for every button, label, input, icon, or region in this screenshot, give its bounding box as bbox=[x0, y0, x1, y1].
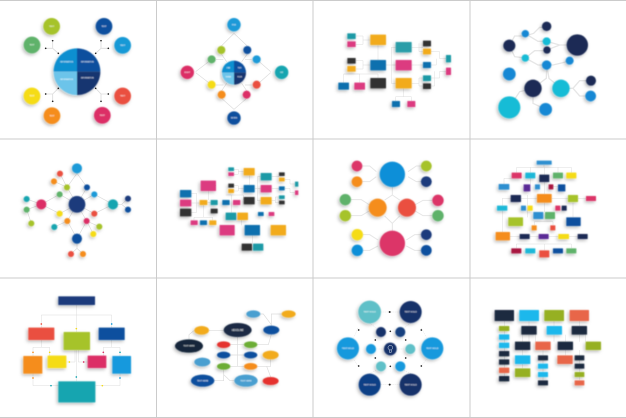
outer and inner nodes bbox=[181, 18, 288, 125]
connector dots bbox=[358, 311, 422, 386]
ovals bbox=[175, 310, 296, 387]
centre pie: THREE bbox=[226, 77, 232, 79]
circles: TEXT HOLD bbox=[364, 312, 376, 314]
circles bbox=[337, 301, 443, 396]
satellite circles: TEXT bbox=[100, 115, 106, 117]
panel: dense multicolour flow chart bbox=[496, 161, 596, 257]
outer and inner nodes: SEVEN bbox=[231, 118, 238, 120]
panel: diamond flow with pie centre bbox=[181, 18, 288, 125]
satellite circles: TEXT bbox=[120, 96, 126, 98]
pie chart hub: INFORMATION bbox=[81, 60, 94, 63]
centre pie: ONE bbox=[227, 67, 231, 69]
panel: wide box flow chart bbox=[180, 167, 298, 251]
satellite circles: TEXT bbox=[49, 26, 55, 28]
circles: TEXT HOLD bbox=[426, 348, 439, 350]
circles: TEXT HOLD bbox=[405, 312, 417, 314]
bubbles bbox=[340, 161, 444, 256]
panel: columned hierarchy boxes bbox=[495, 310, 601, 385]
blocks bbox=[23, 296, 131, 402]
ovals: HEADLINE bbox=[232, 329, 244, 332]
panel: pie hub with eight satellite circles bbox=[24, 18, 131, 124]
centre pie: TWO bbox=[238, 67, 242, 69]
panel: mirrored bubble tree bbox=[340, 161, 444, 256]
boxes bbox=[180, 167, 298, 251]
outer and inner nodes: EIGHT bbox=[185, 72, 191, 74]
panel: large block org flow bbox=[23, 296, 131, 402]
arrow dots bbox=[32, 323, 121, 386]
centre pie bbox=[222, 61, 246, 85]
satellite circles: TEXT bbox=[120, 45, 126, 47]
pie chart hub: INFORMATION bbox=[60, 78, 74, 81]
circles: TEXT HOLD bbox=[342, 348, 355, 350]
satellite circles: TEXT bbox=[29, 45, 35, 47]
satellite circles: TEXT bbox=[49, 115, 55, 117]
satellite circles: TEXT bbox=[29, 96, 35, 98]
bubbles bbox=[498, 22, 596, 118]
network nodes bbox=[24, 163, 131, 257]
panel: oval flow with headline bbox=[175, 310, 296, 387]
panel: hexagon circles with lightbulb bbox=[337, 301, 443, 396]
panel: bubble network bbox=[498, 22, 596, 118]
pie chart hub: INFORMATION bbox=[81, 77, 94, 80]
panel: coloured diamond network bbox=[24, 163, 131, 257]
ovals: TEXT HERE bbox=[183, 346, 195, 348]
outer and inner nodes: SIX bbox=[280, 72, 284, 74]
circles: TEXT HOLD bbox=[405, 384, 417, 386]
outer and inner nodes: FIVE bbox=[232, 24, 237, 26]
boxes bbox=[338, 33, 451, 107]
centre pie: FOUR bbox=[237, 77, 243, 79]
satellite circles: TEXT bbox=[101, 26, 107, 28]
circles: TEXT HOLD bbox=[364, 384, 376, 386]
ovals: TEXT HERE bbox=[240, 380, 252, 382]
boxes bbox=[496, 161, 596, 257]
icon: lightbulb bbox=[388, 345, 393, 352]
boxes bbox=[495, 310, 601, 385]
pie chart hub: INFORMATION bbox=[60, 60, 74, 63]
pie chart hub bbox=[54, 48, 100, 95]
satellite circles bbox=[24, 18, 131, 124]
ovals: TEXT HERE bbox=[197, 380, 209, 382]
panel: box flow chart A bbox=[338, 33, 451, 107]
